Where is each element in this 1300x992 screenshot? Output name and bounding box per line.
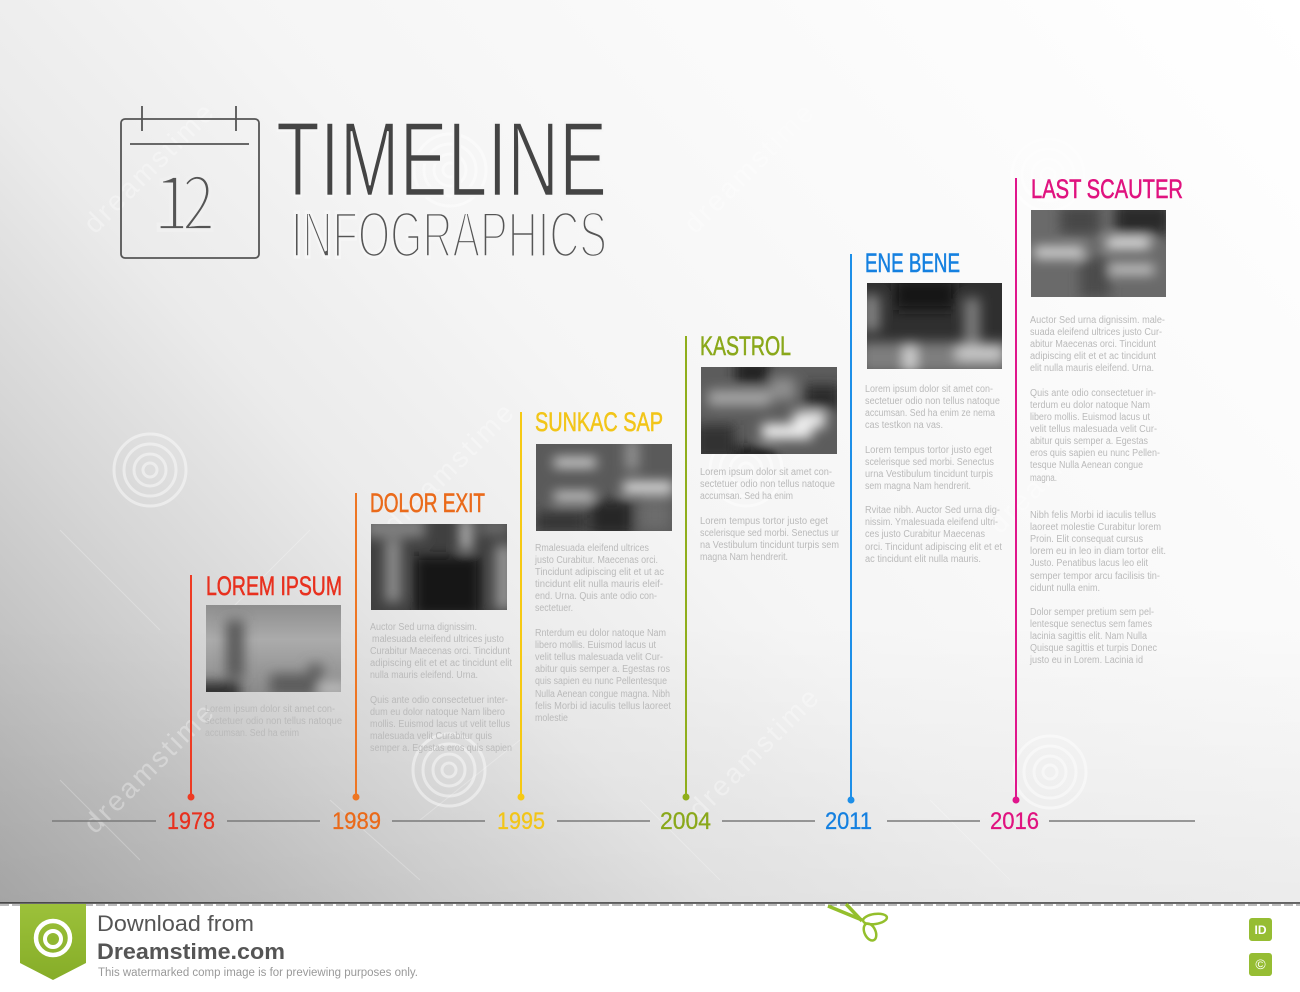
badge: copyright: ©	[1255, 956, 1266, 972]
body text: accumsan. Sed ha enim ze nema	[865, 408, 995, 419]
year: 1978	[167, 808, 215, 835]
body text: scelerisque sed morbi. Senectus	[865, 457, 994, 468]
cut line	[0, 902, 1300, 904]
body text: Proin. Elit consequat cursus	[1030, 534, 1143, 545]
body text: Tincidunt adipiscing elit et ut ac	[535, 567, 664, 578]
calendar number: 2	[182, 142, 215, 252]
stem	[188, 575, 194, 800]
body text: libero mollis. Euismod lacus ut	[535, 640, 656, 651]
body text: sectetuer odio non tellus natoque	[700, 479, 835, 490]
body text: Quisque sagittis et turpis Donec	[1030, 643, 1157, 654]
body text: sem magna Nam hendrerit.	[865, 481, 971, 492]
badge: copyright	[1249, 953, 1272, 976]
body text: quis sapien eu nunc Pellentesque	[535, 676, 667, 687]
body text: cidunt nulla enim.	[1030, 583, 1100, 594]
year: 2016	[990, 808, 1039, 835]
body text: velit tellus malesuada velit Cur-	[1030, 424, 1157, 435]
badge: ID	[1249, 918, 1272, 941]
image	[371, 524, 507, 610]
body text: urna Vestibulum tincidunt turpis	[865, 469, 993, 480]
heading: SUNKAC SAP	[535, 407, 663, 437]
calendar header line	[130, 143, 249, 145]
body text: abitur Maecenas orci. Tincidunt	[1030, 339, 1156, 350]
panel: 2004	[660, 331, 840, 835]
body text: na Vestibulum tincidunt turpis sem	[700, 540, 839, 551]
body text: justo eu in Lorem. Lacinia id	[1029, 655, 1143, 666]
body text: malesuada eleifend ultrices justo	[372, 634, 504, 645]
body text: molestie	[535, 713, 568, 724]
heading: LAST SCAUTER	[1031, 174, 1183, 204]
panel: 1978	[167, 571, 348, 835]
brand name: Dreamstime.com	[97, 939, 285, 964]
download text: Download from	[97, 911, 254, 936]
body text	[865, 384, 1002, 565]
year: 2011	[825, 808, 872, 835]
body text: malesuada velit Curabitur quis	[370, 731, 492, 742]
body text: Lorem tempus tortor justo eget	[700, 516, 828, 527]
title	[276, 99, 607, 271]
image	[536, 440, 673, 535]
body text: elit nulla mauris eleifend. Urna.	[1030, 363, 1154, 374]
body text: abitur quis semper a. Egestas	[1030, 436, 1148, 447]
body text: lorem eu in leo in diam tortor elit.	[1030, 546, 1166, 557]
calendar number: 1	[152, 142, 194, 252]
body text: mollis. Euismod lacus ut velit tellus	[370, 719, 510, 730]
body text: sectetuer.	[535, 603, 573, 614]
calendar pegs	[142, 106, 236, 131]
watermark pattern	[60, 97, 1124, 880]
body text: Lorem tempus tortor justo eget	[865, 445, 992, 456]
body text: cas testkon na vas.	[865, 420, 943, 431]
badge: ID: ID	[1254, 923, 1267, 937]
body text: felis Morbi id iaculis tellus laoreet	[535, 701, 671, 712]
body text	[370, 622, 512, 754]
body text: Lorem ipsum dolor sit amet con-	[700, 467, 832, 478]
year: 1989	[332, 808, 381, 835]
disclaimer: This watermarked comp image is for previewing purposes only.	[98, 967, 418, 979]
body text: Rnterdum eu dolor natoque Nam	[535, 628, 666, 639]
body text: end. Urna. Quis ante odio con-	[535, 591, 657, 602]
body text: terdum eu dolor natoque Nam	[1030, 400, 1150, 411]
body text: ac tincidunt elit nulla mauris.	[865, 554, 981, 565]
stem	[1012, 178, 1020, 804]
body text: semper a. Egestas eros quis sapien	[370, 743, 512, 754]
body text	[1029, 315, 1166, 666]
image	[867, 283, 1002, 369]
watermark pattern: dreamstime	[677, 97, 819, 239]
body text	[534, 543, 671, 724]
timeline axis	[52, 820, 1195, 822]
body text: suada eleifend ultrices justo Cur-	[1030, 327, 1162, 338]
body text: lacinia sagittis elit. Nam Nulla	[1030, 631, 1147, 642]
panel: 1989	[332, 488, 513, 835]
calendar number	[152, 142, 215, 252]
calendar icon	[121, 106, 259, 258]
body text: abitur quis semper a. Egestas ros	[535, 664, 670, 675]
panel: 2011	[825, 248, 1010, 835]
body text: justo Curabitur. Maecenas orci.	[534, 555, 658, 566]
body text: adipiscing elit et et ac tincidunt	[1030, 351, 1156, 362]
year: 2004	[660, 808, 711, 835]
watermark pattern: dreamstime	[377, 397, 519, 539]
panel: 2016	[990, 174, 1183, 835]
body text: Quis ante odio consectetuer inter-	[370, 695, 508, 706]
watermark pattern: dreamstime	[682, 682, 824, 824]
body text: sectetuer odio non tellus natoque	[205, 716, 342, 727]
body text: tesque Nulla Aenean congue	[1030, 460, 1143, 471]
body text: accumsan. Sed ha enim	[205, 728, 299, 739]
body text: libero mollis. Euismod lacus ut	[1030, 412, 1150, 423]
image	[1031, 210, 1166, 297]
body text: Nibh felis Morbi id iaculis tellus	[1030, 510, 1156, 521]
title line 1: TIMELINE	[276, 99, 607, 219]
image	[701, 367, 837, 454]
body text: dum eu dolor natoque Nam libero	[370, 707, 505, 718]
body text: Nulla Aenean congue magna. Nibh	[535, 689, 670, 700]
stem	[848, 254, 854, 804]
body text: accumsan. Sed ha enim	[700, 491, 793, 502]
body text: lentesque senectus sem fames	[1030, 619, 1152, 630]
body text: laoreet molestie Curabitur lorem	[1030, 522, 1161, 533]
body text: Rvitae nibh. Auctor Sed urna dig-	[865, 505, 1000, 516]
body text: nulla mauris eleifend. Urna.	[370, 670, 478, 681]
body text: scelerisque sed morbi. Senectus ur	[700, 528, 840, 539]
watermark pattern: dreamstime	[77, 697, 219, 839]
body text: orci. Tincidunt adipiscing elit et et	[865, 542, 1002, 553]
icon: scissors	[828, 904, 888, 942]
heading: DOLOR EXIT	[370, 488, 485, 518]
stem	[518, 412, 524, 800]
stem	[352, 493, 360, 800]
body text: adipiscing elit et et ac tincidunt elit	[370, 658, 512, 669]
footer	[0, 903, 1300, 992]
body text: Quis ante odio consectetuer in-	[1030, 388, 1156, 399]
body text: Lorem ipsum dolor sit amet con-	[865, 384, 993, 395]
image	[206, 605, 341, 692]
watermark pattern: dreamstime	[982, 397, 1124, 539]
heading: ENE BENE	[865, 248, 960, 278]
heading: LOREM IPSUM	[206, 571, 342, 601]
body text: sectetuer odio non tellus natoque	[865, 396, 1000, 407]
watermark pattern: dreamstime	[77, 97, 219, 239]
panel: 1995	[497, 407, 673, 835]
body text: magna.	[1030, 473, 1057, 484]
body text: Dolor semper pretium sem pel-	[1030, 607, 1154, 618]
stem	[682, 336, 690, 800]
body text: Justo. Penatibus lacus leo elit	[1030, 558, 1148, 569]
body text	[205, 704, 342, 739]
body text: semper tempor arcu facilisis tin-	[1030, 571, 1160, 582]
body text: Rmalesuada eleifend ultrices	[535, 543, 649, 554]
body text: velit tellus malesuada velit Cur-	[535, 652, 663, 663]
body text: tincidunt elit nulla mauris eleif-	[535, 579, 663, 590]
body text: Lorem ipsum dolor sit amet con-	[205, 704, 335, 715]
body text: Auctor Sed urna dignissim. male-	[1030, 315, 1165, 326]
body text: magna Nam hendrerit.	[700, 552, 788, 563]
year: 1995	[497, 808, 545, 835]
body text: nissim. Ymalesuada eleifend ultri-	[865, 517, 998, 528]
icon: dreamstime ribbon	[20, 904, 86, 980]
body text: Curabitur Maecenas orci. Tincidunt	[370, 646, 510, 657]
body text: Auctor Sed urna dignissim.	[370, 622, 477, 633]
body text: ces justo Curabitur Maecenas	[865, 529, 985, 540]
body text	[700, 467, 840, 563]
title line 2: INFOGRAPHICS	[291, 198, 607, 271]
heading: KASTROL	[700, 331, 791, 361]
body text: eros quis sapien eu nunc Pellen-	[1030, 448, 1160, 459]
